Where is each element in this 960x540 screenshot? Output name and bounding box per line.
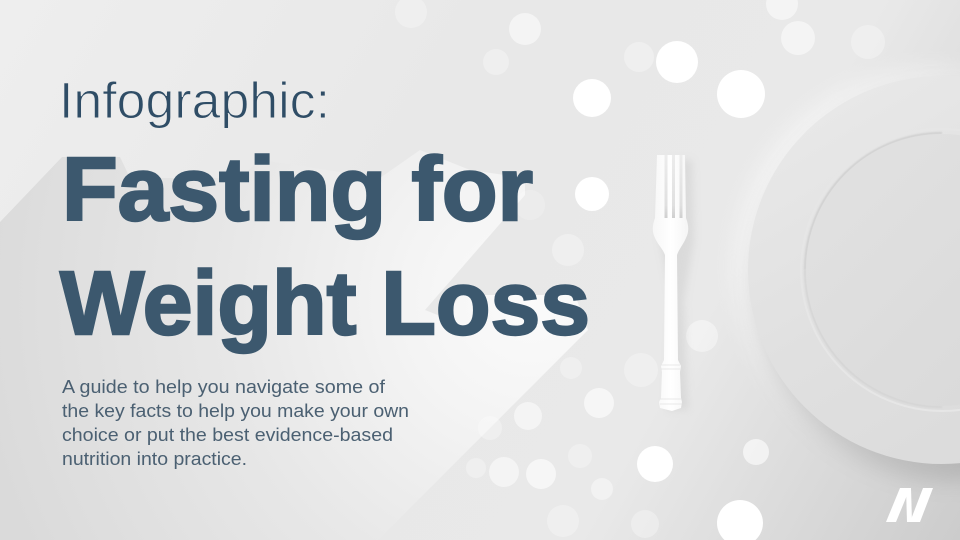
title: Fasting for: Fasting for	[62, 140, 533, 240]
icon: logo	[886, 488, 933, 522]
bokeh circles	[395, 0, 885, 540]
icon: fork	[653, 155, 694, 411]
description text	[62, 376, 409, 469]
title: Weight Loss: Weight Loss	[60, 254, 590, 354]
description text: A guide to help you navigate some of	[62, 376, 386, 397]
description text: the key facts to help you make your own	[62, 400, 409, 421]
long shadow of the title	[0, 150, 588, 540]
description text: nutrition into practice.	[62, 448, 247, 469]
description text: choice or put the best evidence-based	[62, 424, 393, 445]
heading: Infographic: Infographic:	[59, 72, 330, 129]
icon: plate	[736, 71, 960, 478]
